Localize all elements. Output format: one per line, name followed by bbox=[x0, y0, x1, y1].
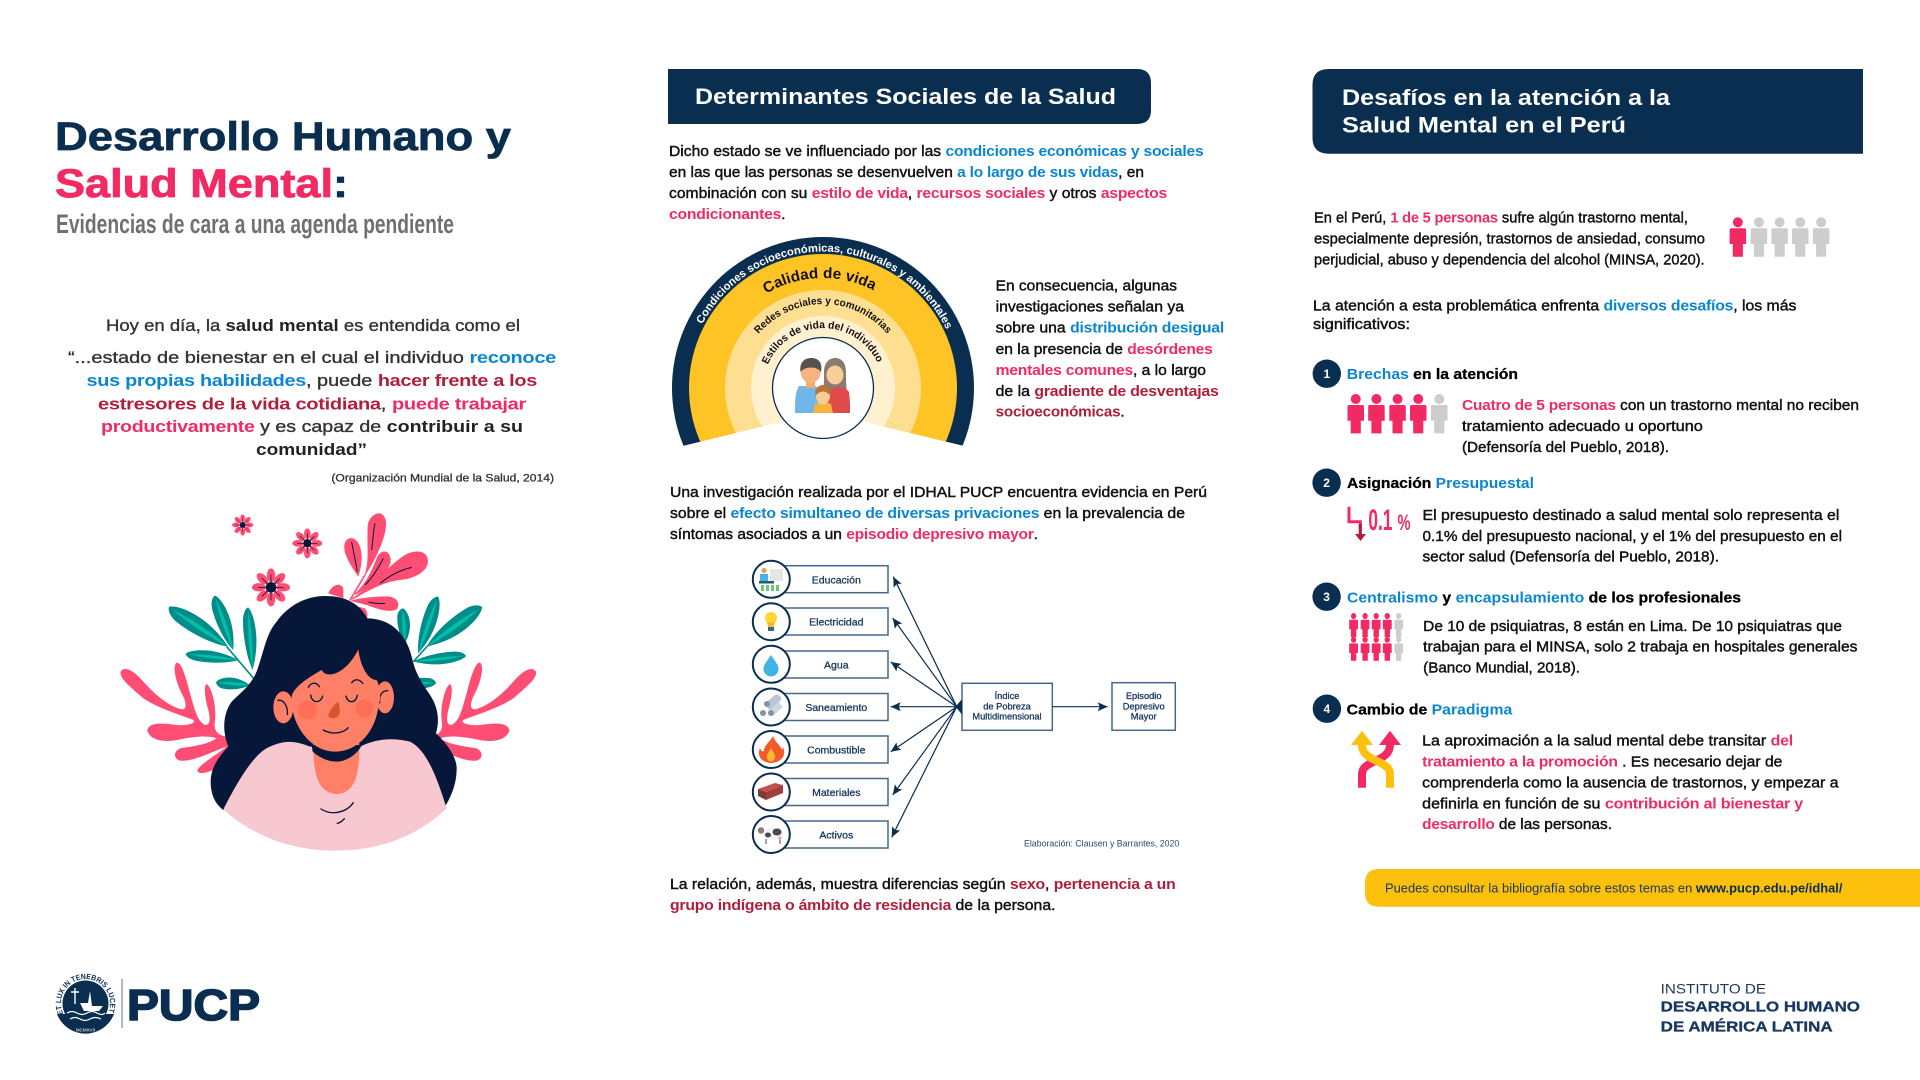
text: consecuencia: socioeconómicas . bbox=[996, 405, 1125, 421]
episode box text: Depresivo bbox=[1123, 701, 1165, 711]
icon: pipes bbox=[760, 694, 783, 716]
paragraph: en las que las personas se desenvuelven a lo largo de sus vidas , en bbox=[669, 165, 1144, 181]
header: Salud Mental en el Perú bbox=[1342, 113, 1626, 138]
boxes bbox=[771, 566, 1175, 848]
text: prevalence: perjudicial, abuso y dependencia del alcohol (MINSA, 2020). bbox=[1314, 252, 1705, 268]
labels: Activos bbox=[819, 830, 853, 842]
item 3 bbox=[1312, 582, 1858, 677]
icon: 0.1% arrow: 0.1 bbox=[1368, 504, 1392, 537]
text: (Banco Mundial, 2018). bbox=[1423, 661, 1580, 677]
icon: flame bbox=[759, 736, 784, 763]
labels: Combustible bbox=[807, 744, 866, 756]
text: consecuencia: en la presencia de desórdenes bbox=[996, 342, 1213, 358]
episode box text: Mayor bbox=[1131, 712, 1157, 722]
number badge bbox=[1313, 360, 1341, 388]
seal: MCMXVII bbox=[76, 1028, 95, 1032]
text: relación: La relación, además, muestra diferencias según sexo, pertenencia a un bbox=[670, 877, 1176, 893]
icon: 0.1% arrow bbox=[1349, 504, 1410, 541]
heading: Centralismo y encapsulamiento de los profesionales bbox=[1347, 589, 1741, 606]
illustration: woman with plants bbox=[121, 513, 536, 851]
quote: productivamente y es capaz de contribuir a su bbox=[101, 418, 523, 436]
hair bbox=[211, 596, 457, 810]
text: investigación: síntomas asociados a un episodio depresivo mayor . bbox=[670, 527, 1038, 543]
text: consecuencia: investigaciones señalan ya bbox=[996, 300, 1185, 316]
arc labels: Calidad de vida bbox=[763, 267, 876, 292]
arc labels: Condiciones socioeconómicas, culturales y ambientales bbox=[696, 244, 951, 329]
labels: Electricidad bbox=[809, 617, 864, 629]
text: trabajan para el MINSA, solo 2 trabaja en hospitales generales bbox=[1423, 640, 1858, 656]
text: comprenderla como la ausencia de trastornos, y empezar a bbox=[1422, 776, 1840, 792]
number badge: 2 bbox=[1323, 476, 1330, 490]
quote: estresores de la vida cotidiana , puede trabajar bbox=[98, 395, 527, 413]
index box text: Multidimensional bbox=[972, 712, 1042, 722]
labels: Saneamiento bbox=[805, 702, 867, 714]
wordmark: PUCP bbox=[127, 981, 260, 1030]
text: challenges intro bbox=[1313, 299, 1796, 333]
heading: Asignación Presupuestal bbox=[1347, 475, 1534, 492]
number badge bbox=[1313, 694, 1341, 723]
index box text bbox=[972, 691, 1042, 722]
source note: Elaboración: Clausen y Barrantes, 2020 bbox=[1024, 839, 1179, 850]
arc labels: Estilos de vida del individuo bbox=[762, 320, 882, 364]
text: definirla en función de su contribución al bienestar y bbox=[1422, 796, 1803, 812]
episode box text bbox=[1123, 691, 1165, 722]
header: Desafíos en la atención a la bbox=[1342, 85, 1671, 110]
text: (Defensoría del Pueblo, 2018). bbox=[1462, 440, 1669, 456]
text: La aproximación a la salud mental debe transitar del bbox=[1422, 734, 1793, 750]
number badge bbox=[1312, 468, 1341, 497]
episode box text: Episodio bbox=[1126, 691, 1162, 701]
logo: IDHAL: INSTITUTO DE bbox=[1661, 980, 1766, 996]
paragraph: Dicho estado se ve influenciado por las condiciones económicas y sociales bbox=[669, 144, 1204, 160]
text: challenges intro: La atención a esta problemática enfrenta diversos desafíos , los más bbox=[1313, 299, 1796, 315]
icon: cow bbox=[758, 827, 783, 844]
seal: ET LUX IN TENEBRIS LUCET bbox=[56, 974, 116, 1014]
callout: bibliography: Puedes consultar la bibliografía sobre estos temas en www.pucp.edu.pe/idhal/ bbox=[1385, 881, 1843, 895]
labels: Agua bbox=[824, 659, 849, 671]
teal leaves bbox=[164, 593, 487, 691]
title: Salud Mental : bbox=[55, 162, 348, 206]
citation: (Organización Mundial de la Salud, 2014) bbox=[331, 473, 554, 485]
text: relación: grupo indígena o ámbito de residencia de la persona. bbox=[670, 898, 1056, 914]
heading: Cambio de Paradigma bbox=[1347, 701, 1513, 718]
pink plant top bbox=[328, 513, 428, 620]
icon: 4 of 5 people bbox=[1348, 394, 1448, 433]
text: consecuencia bbox=[996, 279, 1224, 421]
text: consecuencia: sobre una distribución desigual bbox=[996, 321, 1224, 337]
ears bbox=[273, 681, 394, 723]
paragraph: condicionantes . bbox=[669, 207, 786, 223]
number badge: 4 bbox=[1324, 702, 1331, 716]
diagram: multidimensional poverty bbox=[753, 561, 1179, 853]
flowers bbox=[232, 514, 322, 606]
icon: drop bbox=[764, 655, 778, 677]
shirt bbox=[223, 739, 447, 851]
quote: comunidad” bbox=[256, 441, 367, 459]
heading: Brechas en la atención bbox=[1347, 366, 1518, 383]
callout: bibliography bbox=[1365, 869, 1920, 907]
subtitle: Evidencias de cara a una agenda pendiente bbox=[56, 209, 454, 239]
circles bbox=[753, 561, 790, 853]
icon: psychiatrists bbox=[1349, 613, 1403, 661]
text: Cuatro de 5 personas con un trastorno mental no reciben bbox=[1462, 398, 1859, 414]
logo: PUCP bbox=[56, 974, 260, 1034]
panel: determinantes sociales bbox=[668, 69, 1224, 914]
coral leaves bbox=[121, 663, 536, 773]
seal bbox=[56, 974, 116, 1034]
facial features bbox=[298, 680, 373, 823]
text: consecuencia: de la gradiente de desventajas bbox=[996, 384, 1219, 400]
header: Determinantes Sociales de la Salud bbox=[695, 84, 1116, 109]
index box text: Índice bbox=[995, 691, 1019, 701]
icon: crossing arrows bbox=[1351, 731, 1401, 788]
logo: IDHAL: DE AMÉRICA LATINA bbox=[1661, 1019, 1833, 1036]
text: consecuencia: En consecuencia, algunas bbox=[996, 279, 1177, 295]
icon: bulb bbox=[765, 612, 777, 631]
arrows bbox=[891, 577, 1108, 837]
item 2 bbox=[1312, 468, 1842, 566]
labels: Educación bbox=[812, 574, 861, 586]
panel: desafíos bbox=[1312, 69, 1920, 907]
paragraph: combinación con su estilo de vida , recursos sociales y otros aspectos bbox=[669, 186, 1167, 202]
item 1 bbox=[1313, 360, 1859, 456]
text: challenges intro: significativos: bbox=[1313, 317, 1410, 333]
text: relación bbox=[670, 877, 1176, 914]
title: Desarrollo Humano y bbox=[55, 115, 512, 159]
text: sector salud (Defensoría del Pueblo, 2018). bbox=[1422, 550, 1719, 566]
header bbox=[668, 69, 1151, 124]
index box text: de Pobreza bbox=[983, 701, 1032, 711]
icon: 0.1% arrow: % bbox=[1398, 510, 1410, 535]
title bbox=[55, 115, 512, 206]
icon: brick bbox=[758, 783, 783, 800]
header bbox=[1312, 69, 1863, 154]
quote: sus propias habilidades , puede hacer frente a los bbox=[86, 372, 537, 390]
labels bbox=[805, 574, 867, 842]
text: tratamiento adecuado u oportuno bbox=[1462, 419, 1703, 435]
quote: “...estado de bienestar en el cual el individuo reconoce bbox=[68, 349, 556, 367]
text: De 10 de psiquiatras, 8 están en Lima. De 10 psiquiatras que bbox=[1423, 619, 1842, 635]
text: consecuencia: mentales comunes , a lo largo bbox=[996, 363, 1206, 379]
text: desarrollo de las personas. bbox=[1422, 817, 1612, 833]
text: prevalence: especialmente depresión, trastornos de ansiedad, consumo bbox=[1314, 231, 1705, 247]
number badge: 1 bbox=[1323, 367, 1330, 381]
text: El presupuesto destinado a salud mental solo representa el bbox=[1422, 508, 1839, 524]
intro text: Hoy en día, la salud mental es entendida como el bbox=[106, 317, 520, 335]
text bbox=[1462, 398, 1859, 456]
paragraph bbox=[669, 144, 1204, 223]
item 4 bbox=[1313, 694, 1840, 833]
text: prevalence bbox=[1314, 211, 1705, 268]
logo: IDHAL: DESARROLLO HUMANO bbox=[1661, 1000, 1860, 1016]
icon: education bbox=[759, 568, 783, 591]
text: tratamiento a la promoción . Es necesario dejar de bbox=[1422, 755, 1782, 771]
labels: Materiales bbox=[812, 787, 861, 799]
text bbox=[1422, 508, 1842, 566]
text: 0.1% del presupuesto nacional, y el 1% del presupuesto en el bbox=[1422, 529, 1842, 545]
panel: title and quote bbox=[55, 115, 556, 485]
text: investigación: sobre el efecto simultaneo de diversas privaciones en la prevalencia de bbox=[670, 506, 1185, 522]
text: investigación: Una investigación realizada por el IDHAL PUCP encuentra evidencia en Perú bbox=[670, 485, 1207, 501]
text: investigación bbox=[670, 485, 1207, 543]
arc labels: Redes sociales y comunitarias bbox=[754, 297, 890, 334]
text: prevalence: En el Perú, 1 de 5 personas sufre algún trastorno mental, bbox=[1314, 211, 1688, 227]
neck bbox=[313, 743, 359, 794]
text bbox=[1423, 619, 1858, 677]
text bbox=[1422, 734, 1840, 833]
logo: IDHAL bbox=[1661, 980, 1860, 1036]
icon: family bbox=[795, 358, 850, 413]
face bbox=[292, 649, 380, 752]
chart: concentric arcs bbox=[672, 237, 974, 446]
number badge bbox=[1312, 582, 1341, 611]
quote bbox=[68, 349, 556, 459]
number badge: 3 bbox=[1323, 590, 1330, 604]
icon: 1 of 5 people bbox=[1730, 217, 1829, 257]
